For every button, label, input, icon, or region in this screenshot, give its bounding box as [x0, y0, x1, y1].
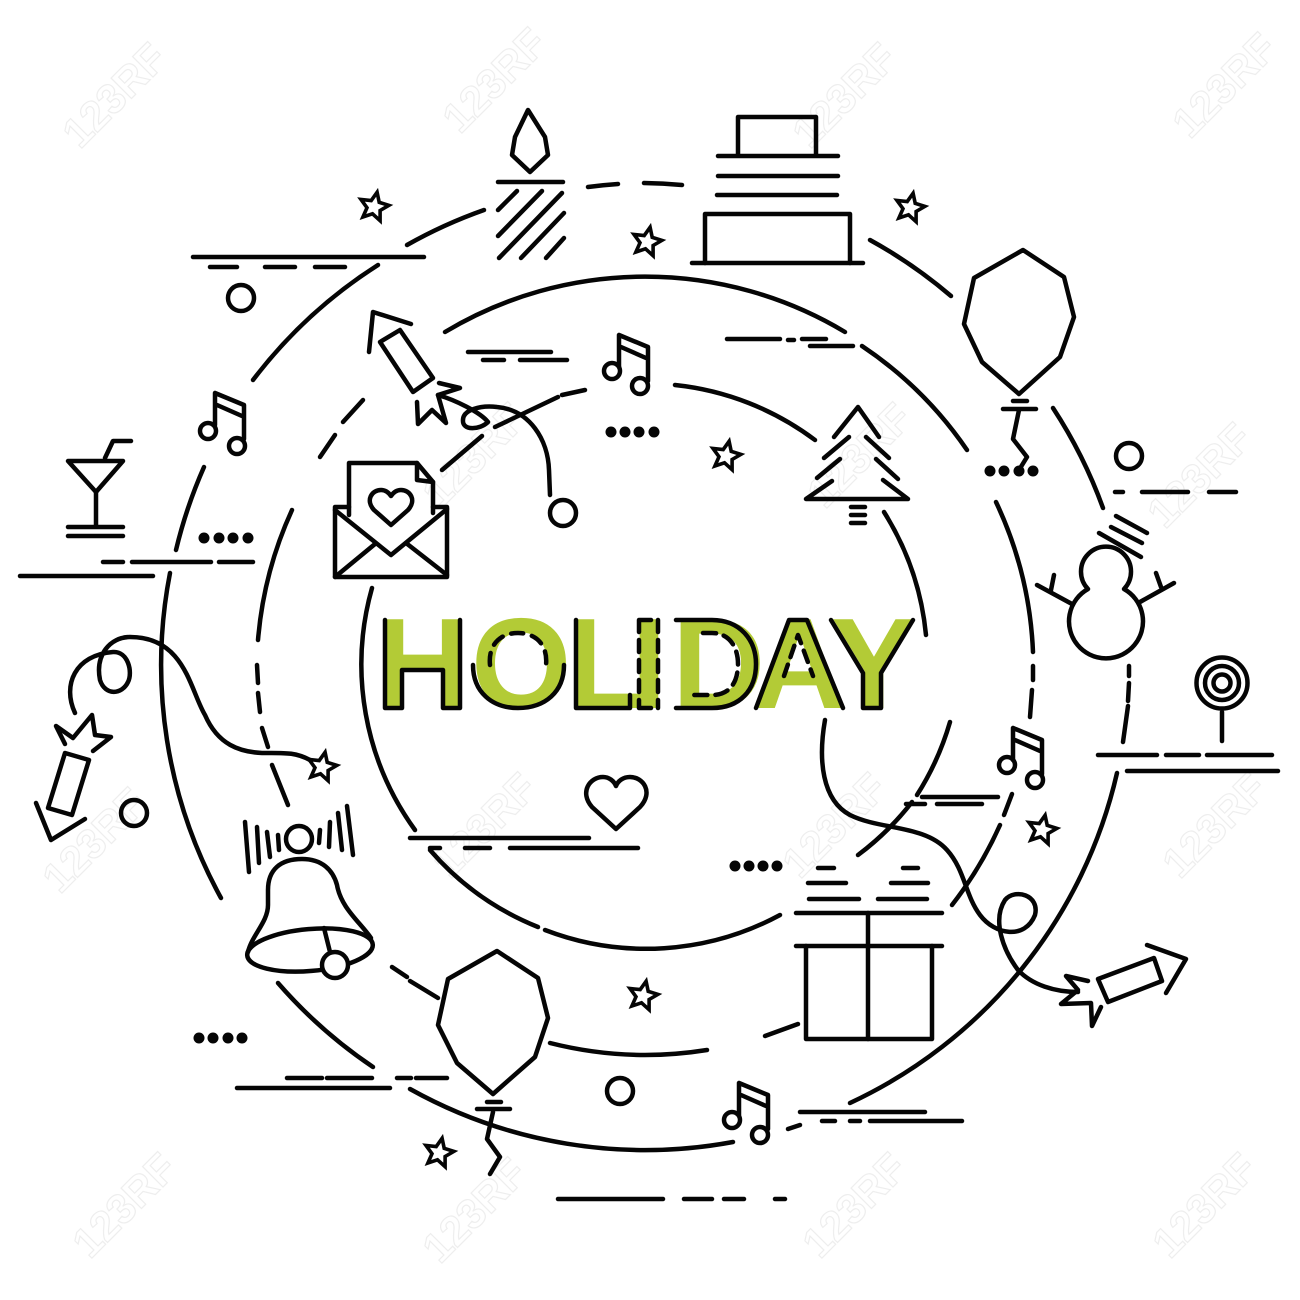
- watermarks: 123RF: [1153, 764, 1276, 886]
- icon: christmas tree: [806, 407, 908, 523]
- watermarks: 123RF: [413, 1149, 536, 1271]
- icon: envelope with heart: [335, 463, 447, 577]
- circle: bottom center: [607, 1078, 633, 1104]
- lines: top left with circle: [193, 257, 424, 311]
- watermarks: 123RF: [798, 394, 921, 516]
- icon: firework top left: [369, 312, 576, 526]
- icon: heart center: [586, 777, 647, 829]
- watermarks: 123RF: [33, 779, 156, 901]
- music note top: [604, 335, 648, 394]
- lines: bottom right: [800, 1112, 962, 1121]
- music note right: [999, 728, 1043, 788]
- lines: right of balloon: [1115, 490, 1236, 494]
- outer ring: [161, 183, 1129, 1150]
- music note left: [200, 393, 245, 454]
- watermarks: 123RF: [773, 764, 896, 886]
- lines: top right of inner: [727, 339, 853, 346]
- watermarks: 123RF: [783, 34, 906, 156]
- music note bottom: [724, 1083, 768, 1143]
- circle: lower left: [121, 800, 147, 826]
- icon: candle: [498, 110, 564, 258]
- lines: under heart: [410, 838, 638, 848]
- lines: under cocktail: [20, 562, 253, 576]
- watermarks: 123RF: [423, 764, 546, 886]
- watermarks: 123RF: [1143, 1144, 1266, 1266]
- icon: snowman: [1037, 516, 1174, 658]
- inner ring: [361, 385, 950, 949]
- dots: left: [198, 532, 254, 544]
- dots: above gift: [730, 860, 782, 872]
- watermarks: 123RF: [63, 1144, 186, 1266]
- watermarks: 123RF: [53, 34, 176, 156]
- lines: right of center: [906, 797, 998, 804]
- icon: balloon top right: [964, 250, 1074, 470]
- icon: cocktail: [68, 441, 131, 536]
- watermarks: 123RF: [1138, 414, 1261, 536]
- circle: right of balloon: [1116, 443, 1142, 469]
- dots: bottom left: [194, 1032, 248, 1044]
- watermarks: 123RF: [793, 1144, 916, 1266]
- icon: firework left: [36, 637, 310, 840]
- watermarks: 123RF: [1163, 24, 1286, 146]
- stars: [309, 192, 1057, 1167]
- icon: cake: [692, 117, 863, 263]
- lines: near firework: [468, 352, 567, 360]
- dots: top center: [606, 426, 660, 438]
- lines: bottom center: [558, 1197, 785, 1201]
- middle ring: [257, 277, 1033, 1055]
- lines: under lollipop: [1098, 755, 1278, 771]
- title: HOLIDAY: HOLIDAY: [376, 592, 917, 736]
- icon: balloon bottom: [438, 951, 548, 1174]
- icon: firework right: [822, 720, 1186, 1026]
- dots: under balloon: [984, 466, 1038, 476]
- watermarks: 123RF: [413, 394, 536, 516]
- icon: bell: [245, 806, 375, 978]
- icon: lollipop: [1196, 658, 1248, 741]
- watermarks: 123RF: [433, 19, 556, 141]
- lines: bottom left: [237, 1078, 447, 1088]
- icon: gift box: [796, 868, 942, 1039]
